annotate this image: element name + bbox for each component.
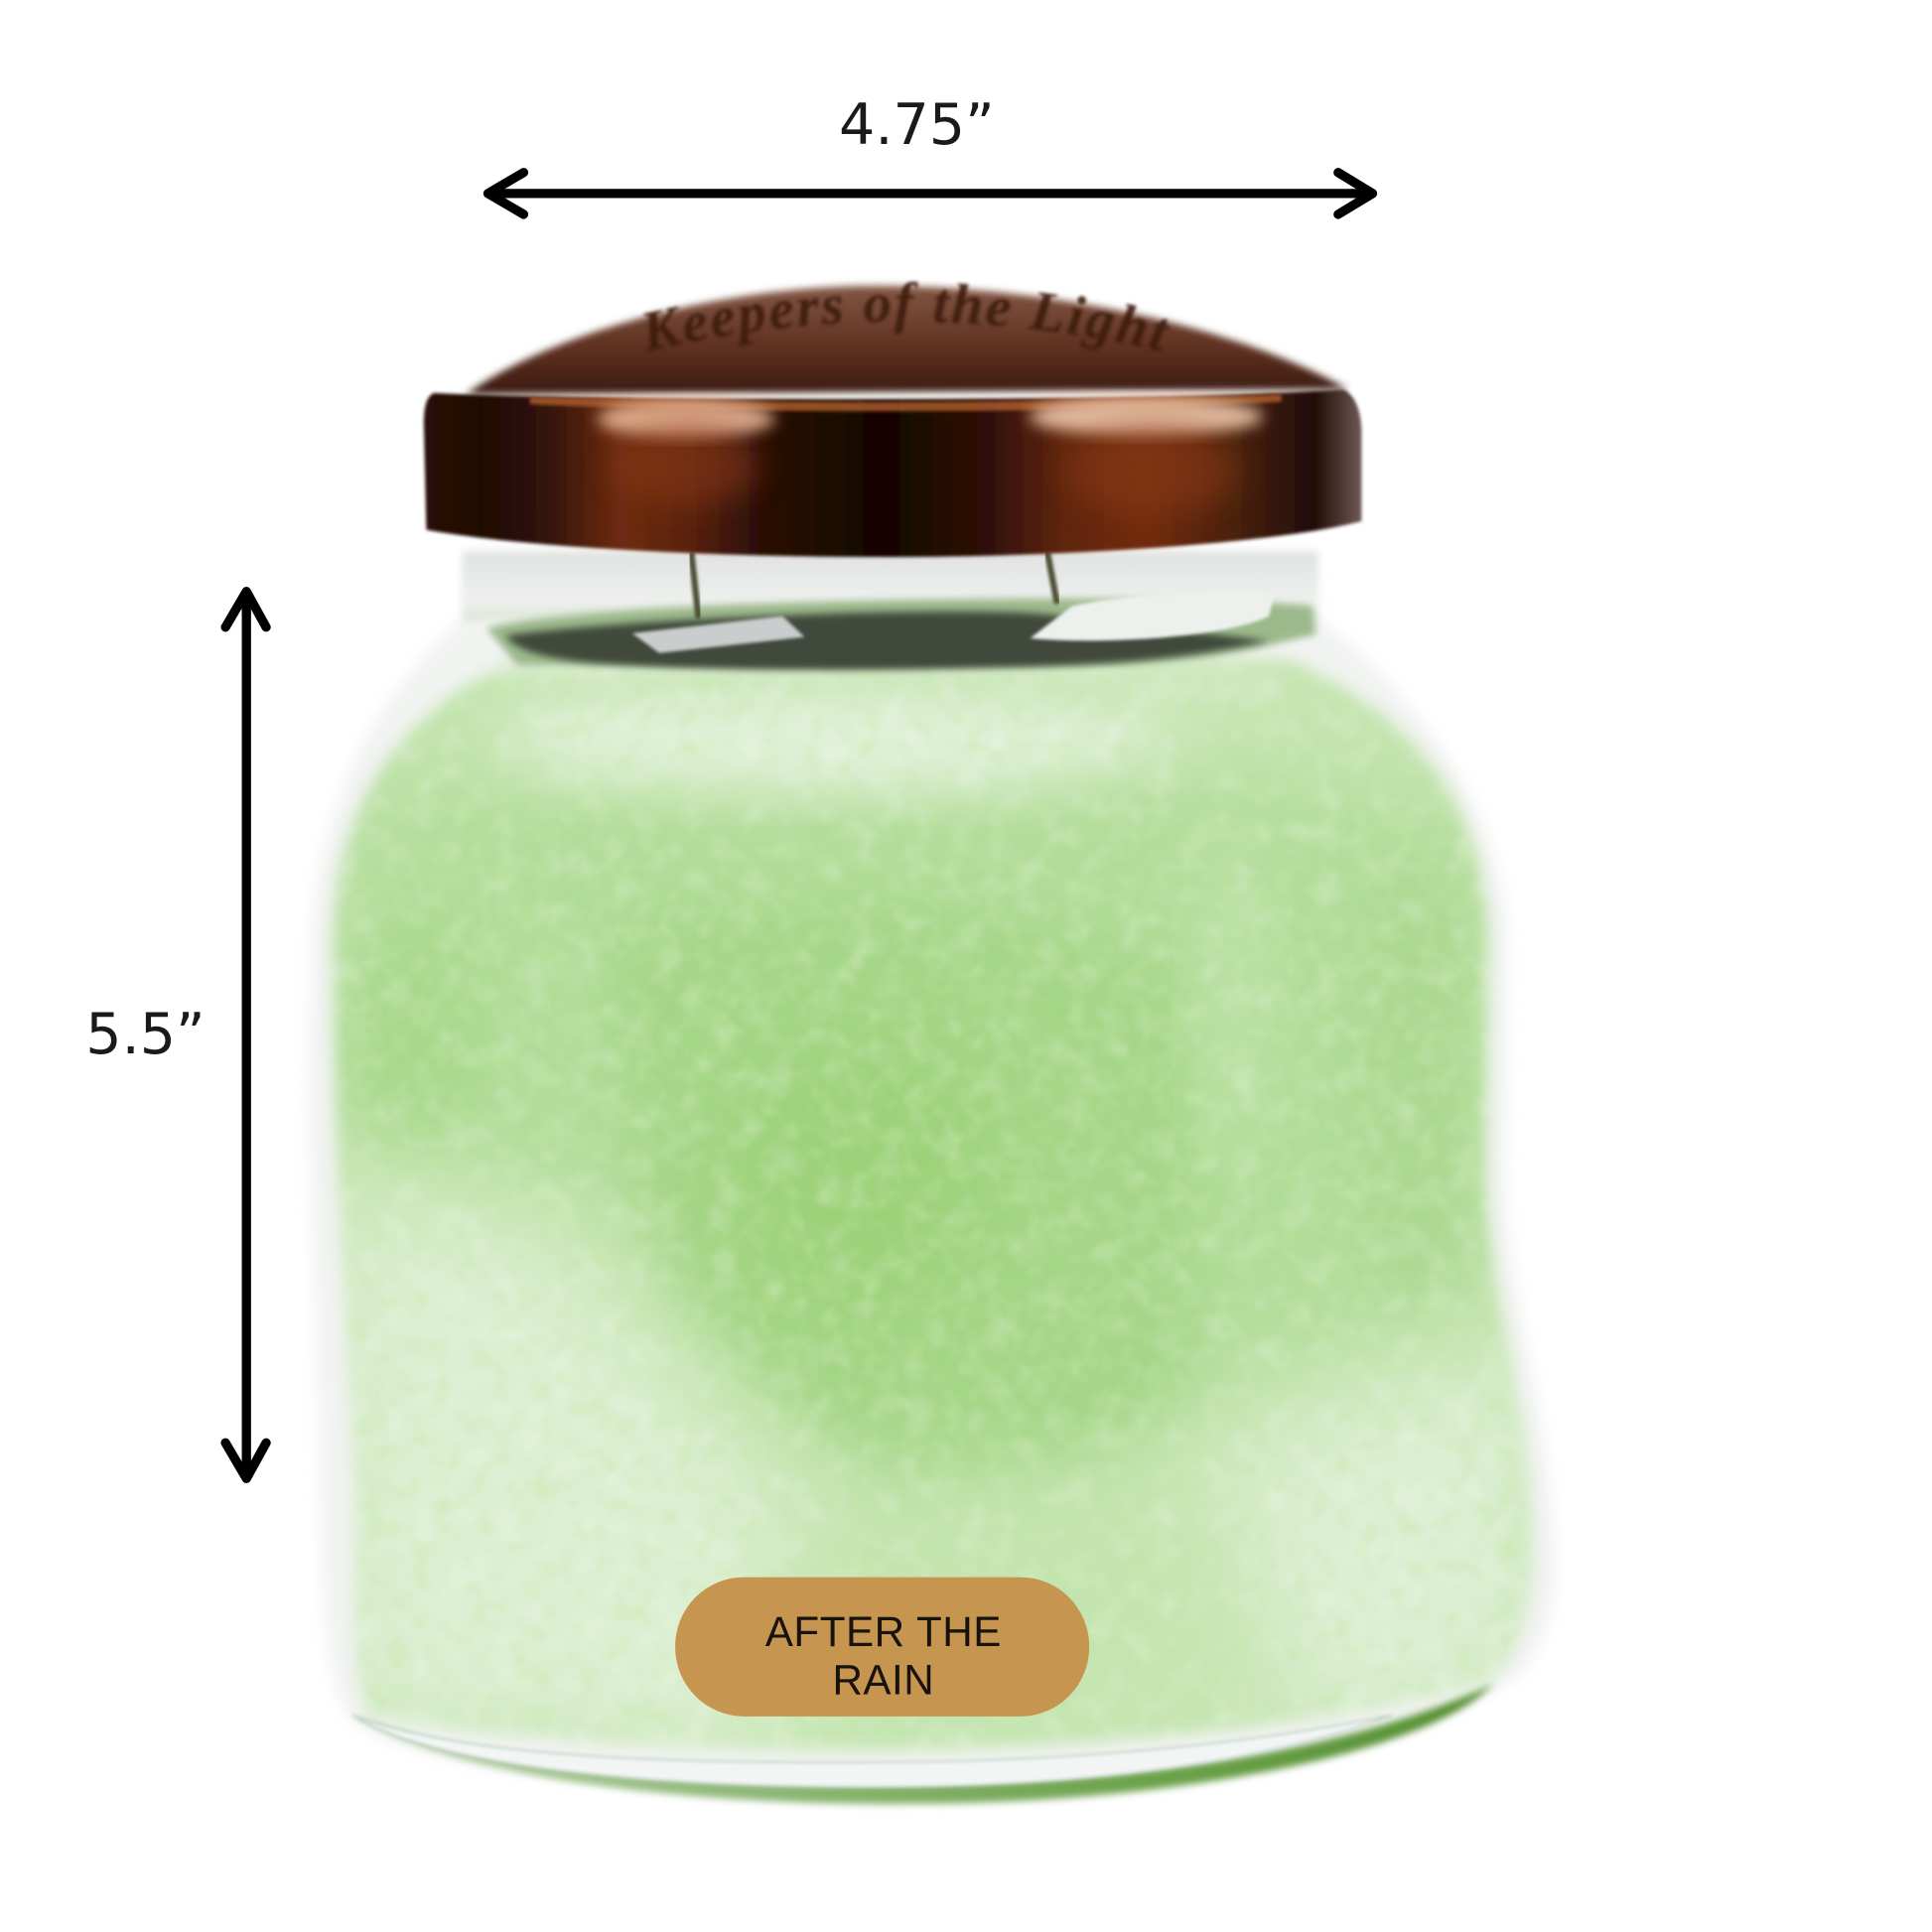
white speckle bbox=[296, 617, 1578, 1799]
lid dome bbox=[466, 286, 1348, 394]
height value: 5.5” bbox=[85, 1002, 206, 1067]
left lid highlight bbox=[598, 399, 775, 439]
green heart core bbox=[615, 904, 1190, 1490]
mid lower green wash bbox=[776, 1478, 1195, 1701]
pale lower cloud right bbox=[1207, 1368, 1540, 1749]
height arrow bbox=[225, 592, 266, 1478]
label pill bbox=[675, 1578, 1089, 1717]
left lid glow bbox=[613, 426, 760, 505]
pale lower cloud left bbox=[333, 1195, 838, 1756]
band top glint bbox=[530, 394, 1282, 411]
width value: 4.75” bbox=[839, 92, 995, 158]
right lid glow bbox=[1066, 426, 1238, 515]
width arrow bbox=[487, 173, 1373, 214]
product diagram bbox=[89, 102, 1554, 1810]
scent label bbox=[675, 1578, 1089, 1717]
right lid highlight bbox=[1029, 397, 1263, 436]
height dimension bbox=[85, 592, 266, 1478]
pale shoulder band bbox=[492, 689, 1207, 793]
green base fill bbox=[351, 1683, 1493, 1804]
glass base reflection bbox=[352, 1716, 1392, 1787]
neck glass bbox=[464, 552, 1317, 622]
copper lid bbox=[421, 279, 1364, 560]
width dimension bbox=[487, 92, 1373, 214]
lid band bbox=[424, 389, 1361, 557]
wax fill bbox=[324, 651, 1541, 1758]
label text: RAIN bbox=[832, 1656, 934, 1703]
right vertical tint bbox=[1408, 931, 1472, 1269]
right wick bbox=[1047, 552, 1057, 604]
left wick base bbox=[632, 617, 804, 653]
green wax line in neck bbox=[486, 599, 1315, 665]
embossed lid lettering: Keepers of the Light bbox=[641, 279, 1171, 351]
dark wax pool bbox=[505, 612, 1269, 670]
left wick bbox=[691, 552, 699, 619]
jar candle bbox=[256, 279, 1554, 1810]
left lobe tint bbox=[340, 936, 467, 1148]
wax base colour bbox=[328, 651, 1537, 1758]
pale centre streak bbox=[1196, 869, 1261, 1106]
upper green body bbox=[333, 768, 1497, 1510]
right wick base bbox=[1031, 592, 1274, 640]
jar neck bbox=[464, 552, 1317, 670]
darkest core bbox=[739, 1050, 986, 1316]
upper wax edge tint bbox=[1054, 669, 1277, 700]
glass jar body bbox=[308, 552, 1556, 1787]
label text: AFTER THE bbox=[765, 1608, 1002, 1655]
green speckle bbox=[296, 617, 1578, 1799]
